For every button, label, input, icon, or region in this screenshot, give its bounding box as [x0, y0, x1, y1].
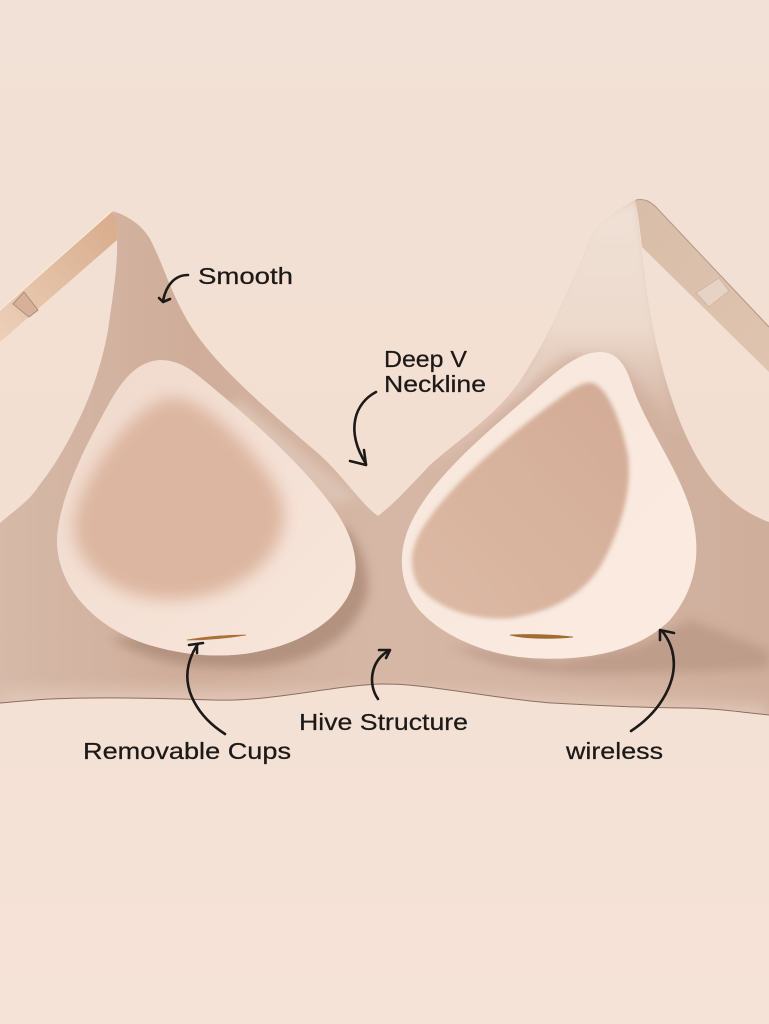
right cup	[402, 352, 696, 659]
left strap	[0, 211, 117, 342]
label: Hive Structure: Hive Structure	[299, 709, 468, 735]
right cup slit	[510, 635, 573, 638]
label: wireless	[565, 630, 674, 764]
label: wireless: wireless	[565, 738, 663, 764]
right strap	[635, 199, 769, 372]
arrow: Deep V Neckline	[350, 392, 376, 465]
left cup slit	[187, 635, 246, 640]
arrow: wireless	[631, 630, 674, 731]
left cup	[57, 360, 356, 656]
arrow: Removable Cups	[187, 643, 225, 734]
label: Removable Cups: Removable Cups	[83, 738, 291, 764]
label: Deep V Neckline	[350, 346, 486, 465]
bra body	[0, 195, 769, 730]
label: Smooth	[159, 263, 293, 302]
left cup inner hollow	[74, 398, 284, 599]
label: Smooth: Smooth	[198, 263, 293, 289]
label: Hive Structure	[299, 650, 468, 735]
right cup inner hollow	[412, 383, 629, 619]
arrow: Smooth	[159, 275, 188, 302]
right strap adjuster	[696, 278, 729, 307]
arrow: Hive Structure	[372, 650, 390, 699]
label: Removable Cups	[83, 643, 291, 764]
label: Deep V Neckline: Deep V	[384, 346, 468, 372]
bottom hem line	[0, 684, 769, 715]
left strap adjuster	[13, 292, 38, 317]
fabric shading and cup shadows	[0, 195, 769, 730]
label: Deep V Neckline: Neckline	[384, 371, 486, 397]
